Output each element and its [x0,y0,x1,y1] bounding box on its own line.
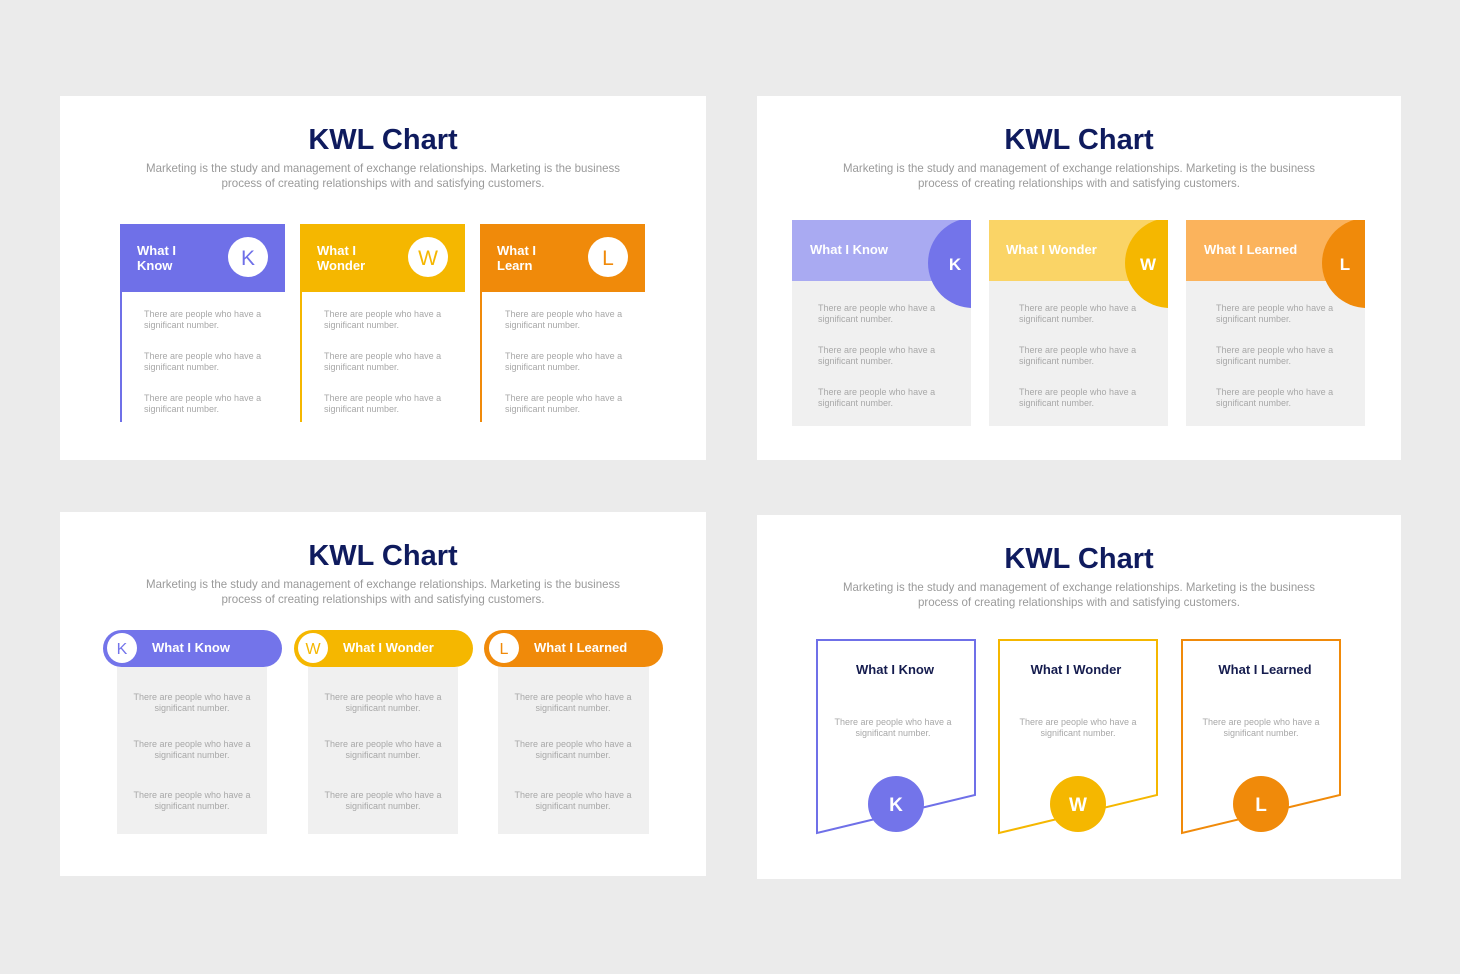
card: What I Learned: significant number. [1216,356,1291,366]
card: What I Know: There are people who have a [818,387,935,397]
column: What I Know: K [241,247,255,270]
card: What I Wonder: W [1069,795,1087,816]
card: What I Know [792,220,971,426]
subtitle [843,161,1315,190]
column: What I Wonder: There are people who have a [324,739,442,749]
column: What I Learned: There are people who have a [505,309,622,319]
column: What I Know: significant number. [144,320,219,330]
column: What I Know: significant number. [154,703,230,713]
column: What I Wonder: significant number. [324,404,399,414]
card: What I Wonder: W [1140,255,1157,274]
panel: bottom-left KWL chart [60,512,706,876]
card: What I Know: significant number. [818,314,893,324]
card: What I Wonder: significant number. [1019,314,1094,324]
card: What I Know: What I Know [810,242,889,257]
column: What I Know [120,224,285,422]
column: What I Know: K [117,641,128,658]
subtitle: Marketing is the study and management of exchange relationships. Marketing is the business [843,580,1315,594]
column: What I Wonder: There are people who have a [324,393,441,403]
column: What I Learned: significant number. [505,320,580,330]
column: What I Know: There are people who have a [144,309,261,319]
column: What I Wonder: W [305,641,321,658]
card: What I Learned: significant number. [1216,398,1291,408]
column: What I Wonder: There are people who have a [324,790,442,800]
card: What I Know: significant number. [855,728,931,738]
card: What I Wonder: There are people who have a [1019,345,1136,355]
column: What I Know: There are people who have a [133,739,251,749]
subtitle: Marketing is the study and management of exchange relationships. Marketing is the business [843,161,1315,175]
card: What I Learned: significant number. [1216,314,1291,324]
card: What I Learned: What I Learned [1204,242,1297,257]
panel: bottom-right KWL chart [757,515,1401,879]
subtitle: process of creating relationships with and satisfying customers. [222,176,544,190]
panel: top-left KWL chart [60,96,706,460]
card: What I Wonder: significant number. [1040,728,1116,738]
column: What I Know: significant number. [144,404,219,414]
card: What I Learned: What I Learned [1218,662,1312,677]
column: What I Wonder: Wonder [317,258,365,273]
column: What I Wonder [294,630,473,834]
column: What I Learned: significant number. [535,703,611,713]
card: What I Know: There are people who have a [818,345,935,355]
column: What I Learned: What I [497,243,536,258]
column: What I Know: There are people who have a [144,393,261,403]
column: What I Wonder: What I Wonder [343,640,434,655]
column: What I Wonder: There are people who have a [324,309,441,319]
card: What I Learned: There are people who have a [1216,387,1333,397]
column: What I Know [103,630,282,834]
title: KWL Chart [1004,124,1154,156]
column: What I Know: There are people who have a [144,351,261,361]
column: What I Know: There are people who have a [133,692,251,702]
card: What I Learned: There are people who have a [1216,345,1333,355]
card: What I Learned: There are people who have a [1216,303,1333,313]
card: What I Know: K [889,795,903,816]
column: What I Learned: There are people who have a [514,739,632,749]
column: What I Learned: What I Learned [534,640,627,655]
column: What I Know: significant number. [154,750,230,760]
column: What I Learned: L [602,247,614,270]
subtitle: process of creating relationships with and satisfying customers. [918,176,1240,190]
subtitle: Marketing is the study and management of exchange relationships. Marketing is the business [146,161,620,175]
column: What I Learned: L [500,641,509,658]
subtitle: process of creating relationships with and satisfying customers. [918,595,1240,609]
card: What I Wonder: There are people who have a [1019,387,1136,397]
card: What I Wonder: There are people who have a [1019,303,1136,313]
card: What I Learned [1182,640,1340,833]
card: What I Wonder: There are people who have a [1019,717,1137,727]
column: What I Wonder: There are people who have a [324,692,442,702]
subtitle [146,161,620,190]
column: What I Wonder: There are people who have a [324,351,441,361]
card: What I Learned [1186,220,1365,426]
column: What I Know: Know [137,258,173,273]
card: What I Learned: There are people who have a [1202,717,1320,727]
column: What I Wonder: significant number. [345,703,421,713]
column: What I Learned: There are people who have a [514,790,632,800]
column: What I Learned [484,630,663,834]
card: What I Know: There are people who have a [834,717,952,727]
column: What I Learned [480,224,645,422]
column: What I Wonder [300,224,465,422]
column: What I Learned: Learn [497,258,532,273]
column: What I Wonder: significant number. [345,801,421,811]
column: What I Know: significant number. [144,362,219,372]
column: What I Learned: significant number. [535,801,611,811]
card: What I Wonder [989,220,1168,426]
card: What I Know [817,640,975,833]
column: What I Learned: There are people who have a [505,351,622,361]
column: What I Learned: significant number. [535,750,611,760]
column: What I Know: There are people who have a [133,790,251,800]
card: What I Wonder: What I Wonder [1031,662,1121,677]
card: What I Learned: L [1255,795,1267,816]
column: What I Know: significant number. [154,801,230,811]
card: What I Know: significant number. [818,398,893,408]
subtitle [843,580,1315,609]
column: What I Learned: There are people who have a [514,692,632,702]
column: What I Learned: significant number. [505,362,580,372]
column: What I Wonder: significant number. [324,362,399,372]
card: What I Learned: L [1340,255,1350,274]
column: What I Learned: There are people who have a [505,393,622,403]
panel: top-right KWL chart [757,96,1412,460]
card: What I Wonder: significant number. [1019,398,1094,408]
card: What I Wonder: significant number. [1019,356,1094,366]
card: What I Know: K [949,255,962,274]
subtitle: process of creating relationships with and satisfying customers. [222,592,544,606]
column: What I Wonder: W [418,247,438,270]
card: What I Know: significant number. [818,356,893,366]
title: KWL Chart [308,540,458,572]
column: What I Wonder: significant number. [324,320,399,330]
column: What I Know: What I [137,243,176,258]
column: What I Wonder: significant number. [345,750,421,760]
column: What I Wonder: What I [317,243,356,258]
title: KWL Chart [1004,543,1154,575]
card: What I Know: There are people who have a [818,303,935,313]
card: What I Wonder [999,640,1157,833]
column: What I Know: What I Know [152,640,231,655]
card: What I Wonder: What I Wonder [1006,242,1097,257]
title: KWL Chart [308,124,458,156]
subtitle [146,577,620,606]
column: What I Learned: significant number. [505,404,580,414]
card: What I Learned: significant number. [1223,728,1299,738]
subtitle: Marketing is the study and management of exchange relationships. Marketing is the business [146,577,620,591]
card: What I Know: What I Know [856,662,935,677]
